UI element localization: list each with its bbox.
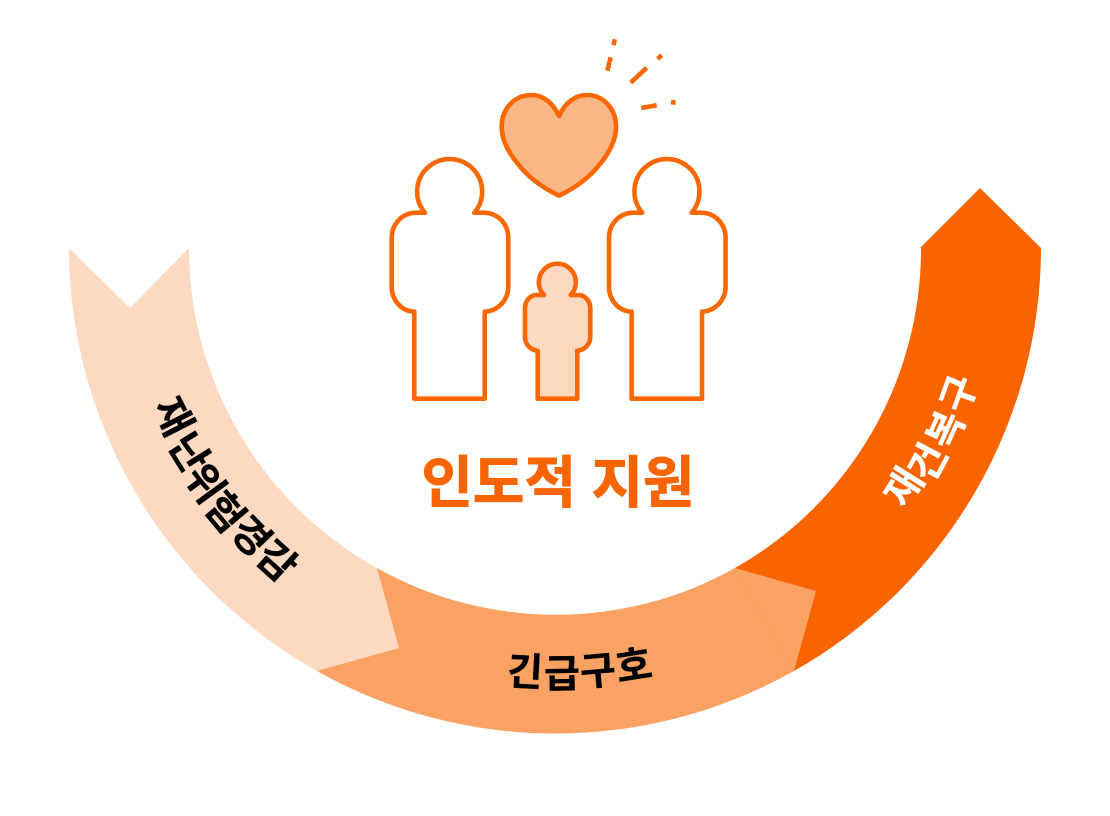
arrow: emergency relief — [317, 568, 816, 734]
icon: right adult — [609, 159, 726, 399]
label: disaster risk reduction: 위 — [175, 456, 233, 512]
icon: child — [525, 264, 590, 399]
label: recovery and reconstruction: 재 — [877, 461, 933, 515]
icon: left adult — [392, 159, 508, 399]
icon: heart — [502, 95, 616, 196]
arrow: disaster risk reduction — [69, 248, 399, 671]
label: disaster risk reduction: 난 — [160, 426, 216, 480]
arrow: recovery and reconstruction — [735, 188, 1041, 671]
label: recovery and reconstruction: 건 — [902, 437, 956, 489]
label: recovery and reconstruction — [877, 370, 986, 515]
icon: family with heart — [392, 39, 726, 399]
label: emergency relief — [506, 643, 655, 697]
title: 인도적 지원 — [421, 452, 695, 514]
label: disaster risk reduction: 감 — [248, 533, 304, 591]
label: disaster risk reduction: 재 — [144, 391, 200, 443]
label: recovery and reconstruction: 복 — [920, 405, 974, 455]
label: disaster risk reduction: 험 — [195, 485, 253, 541]
label: disaster risk reduction: 경 — [221, 508, 279, 566]
icon: sparkle rays — [607, 39, 674, 108]
label: emergency relief: 급 — [544, 653, 580, 697]
label: emergency relief: 구 — [578, 649, 618, 695]
label: emergency relief: 호 — [613, 643, 655, 691]
label: emergency relief: 긴 — [506, 651, 544, 695]
label: recovery and reconstruction: 구 — [934, 370, 986, 418]
label: disaster risk reduction — [144, 391, 304, 591]
